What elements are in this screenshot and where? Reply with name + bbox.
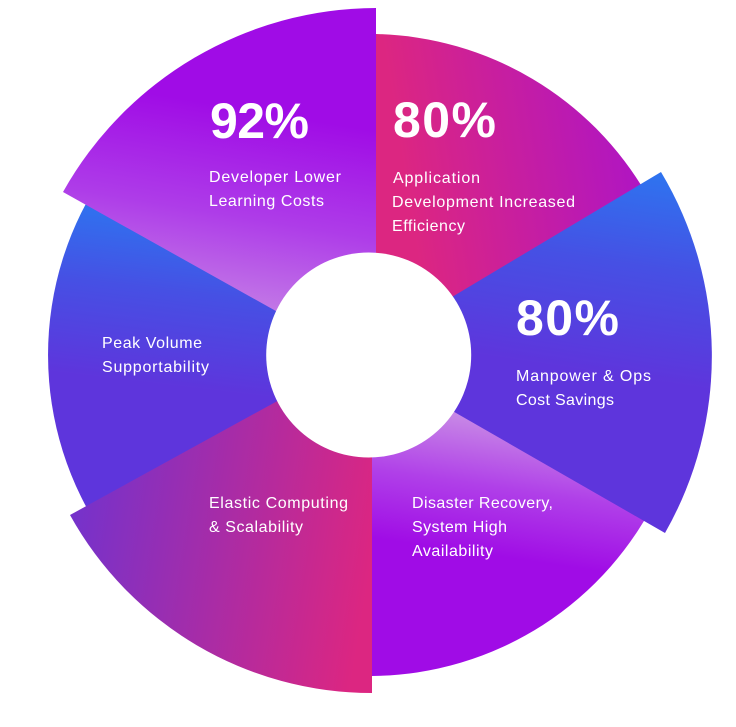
label: disaster recovery [412, 495, 553, 560]
center hole [266, 252, 471, 458]
sector: magenta bottom left [70, 349, 372, 693]
stat: 80%: 80% [516, 290, 619, 346]
label: disaster recovery: System High [412, 519, 507, 536]
label: elastic computing [209, 495, 348, 536]
sector: blue right [355, 172, 712, 533]
label: peak volume: Peak Volume [102, 335, 202, 352]
panel: manpower and ops savings [355, 172, 712, 533]
label: manpower: Manpower & Ops [516, 368, 651, 385]
stat: 92%: 92% [210, 93, 309, 149]
sector: pink [369, 34, 647, 355]
label: developer [209, 169, 342, 210]
sector: violet bottom right [369, 355, 660, 676]
panel: application development efficiency [369, 34, 647, 355]
label: developer: Developer Lower [209, 169, 342, 186]
panel: developer learning costs [63, 8, 376, 367]
label: manpower [516, 368, 651, 409]
stat: 80%: 80% [393, 92, 496, 148]
label: disaster recovery: Disaster Recovery, [412, 495, 553, 512]
label: peak volume: Supportability [102, 359, 209, 376]
sector: blue left [48, 171, 369, 539]
label: peak volume [102, 335, 209, 376]
label: application development [392, 170, 575, 235]
label: application development: Application [393, 170, 480, 187]
panel: disaster recovery [369, 355, 660, 676]
label: developer: Learning Costs [209, 193, 324, 210]
panel: peak volume [48, 171, 369, 539]
label: application development: Efficiency [392, 218, 465, 235]
panel: elastic computing [70, 349, 372, 693]
label: disaster recovery: Availability [412, 543, 493, 560]
label: manpower: Cost Savings [516, 392, 614, 409]
label: application development: Development Increased [392, 194, 575, 211]
sector: violet top left [63, 8, 376, 367]
label: elastic computing: & Scalability [209, 519, 303, 536]
label: elastic computing: Elastic Computing [209, 495, 348, 512]
